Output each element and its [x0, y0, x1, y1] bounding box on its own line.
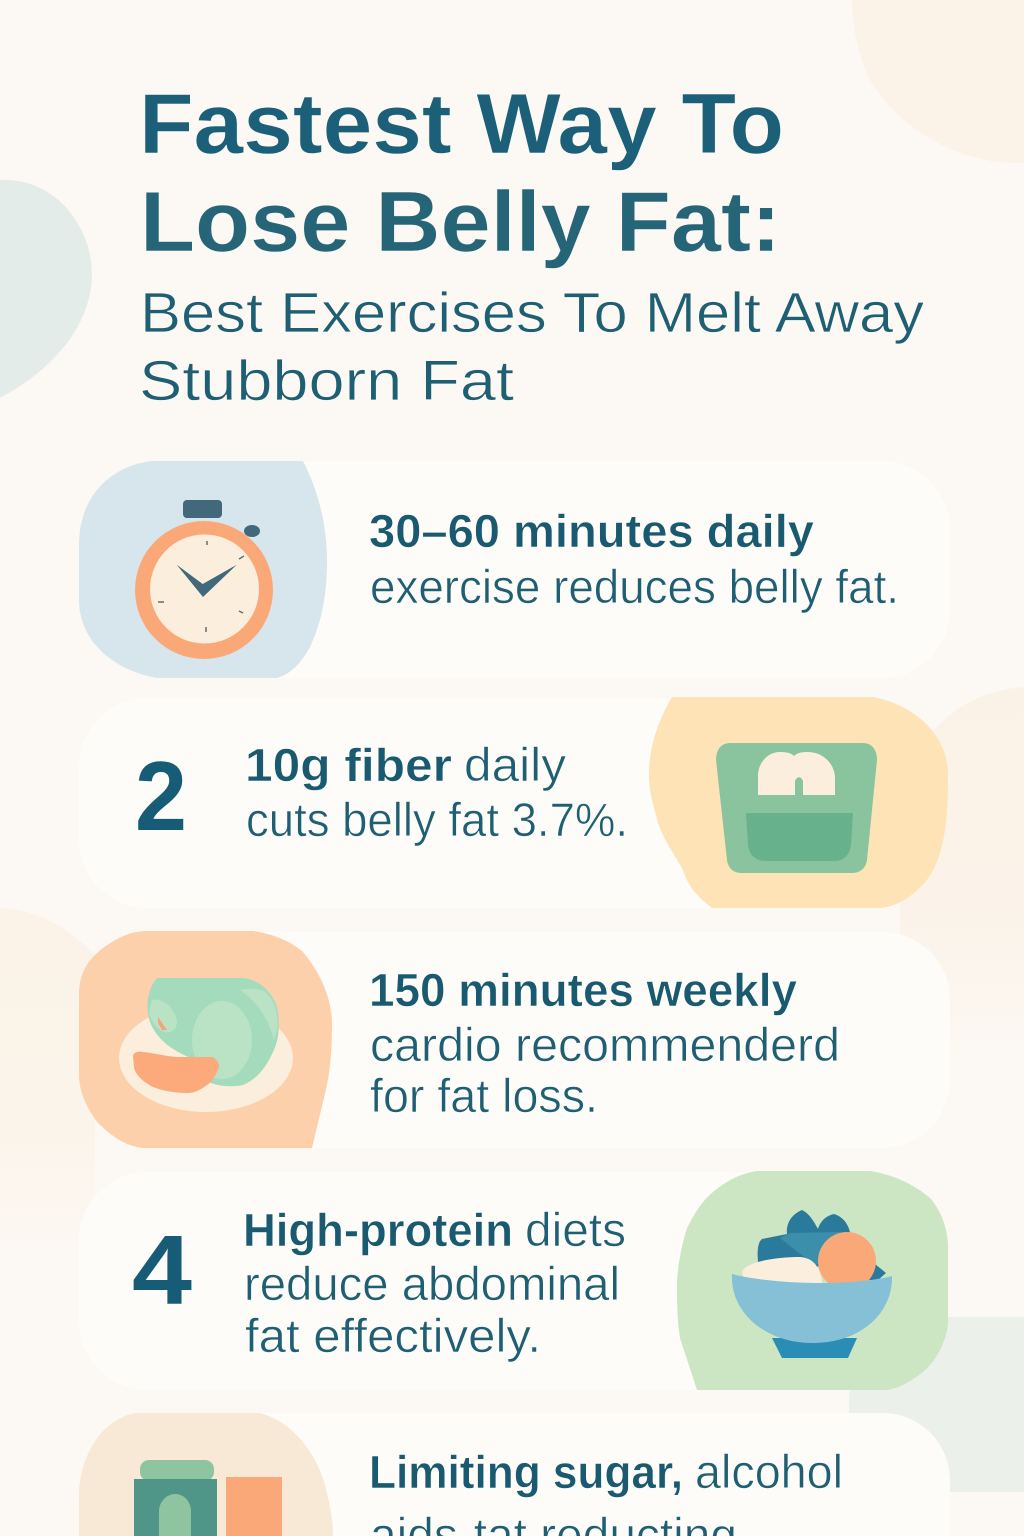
- icon: food plate: [79, 931, 332, 1148]
- heading: fiber: 10g fiber: [245, 739, 452, 791]
- text: cardio line 1: cardio recommenderd: [370, 1018, 840, 1071]
- subtitle: Best Exercises To Melt Away: [140, 281, 925, 345]
- panel: card 1 exercise: [79, 461, 950, 678]
- panel: card 4 protein: [79, 1171, 948, 1390]
- panel: card 3 cardio: [79, 931, 950, 1148]
- text: protein line 3: fat effectively.: [245, 1309, 541, 1362]
- text: fiber benefit: cuts belly fat 3.7%.: [246, 793, 628, 846]
- background blob: right peach: [900, 687, 1024, 1060]
- text: exercise benefit: exercise reduces belly fat.: [370, 560, 899, 613]
- background blob: left blue: [0, 180, 92, 398]
- panel: card 2 fiber: [79, 697, 948, 908]
- background blob: left peach: [0, 908, 95, 1260]
- icon: bowl: [677, 1171, 948, 1390]
- icon: jar and glass: [79, 1413, 333, 1536]
- text: daily: daily: [464, 738, 567, 791]
- title: [139, 77, 784, 270]
- panel: card 5 sugar: [79, 1413, 950, 1536]
- heading: limiting sugar: Limiting sugar,: [369, 1446, 683, 1498]
- text: protein line 2: reduce abdominal: [244, 1257, 620, 1310]
- text: cardio line 2: for fat loss.: [370, 1069, 598, 1122]
- number 2: 2: [135, 741, 187, 851]
- heading: high-protein: High-protein: [243, 1204, 513, 1256]
- icon: scale: [649, 697, 948, 908]
- text: alcohol: alcohol: [695, 1445, 843, 1498]
- title: Lose Belly Fat:: [140, 175, 781, 270]
- background blob: top right: [852, 0, 1024, 163]
- heading: exercise duration: 30–60 minutes daily: [369, 505, 814, 557]
- number 4: 4: [132, 1215, 192, 1325]
- icon: stopwatch: [79, 461, 327, 678]
- text: diets: diets: [525, 1203, 626, 1256]
- subtitle: [139, 281, 925, 413]
- subtitle: Stubborn Fat: [139, 349, 514, 413]
- heading: cardio: 150 minutes weekly: [369, 964, 797, 1016]
- title: Fastest Way To: [139, 77, 784, 172]
- background blob: bottom right: [849, 1317, 1024, 1492]
